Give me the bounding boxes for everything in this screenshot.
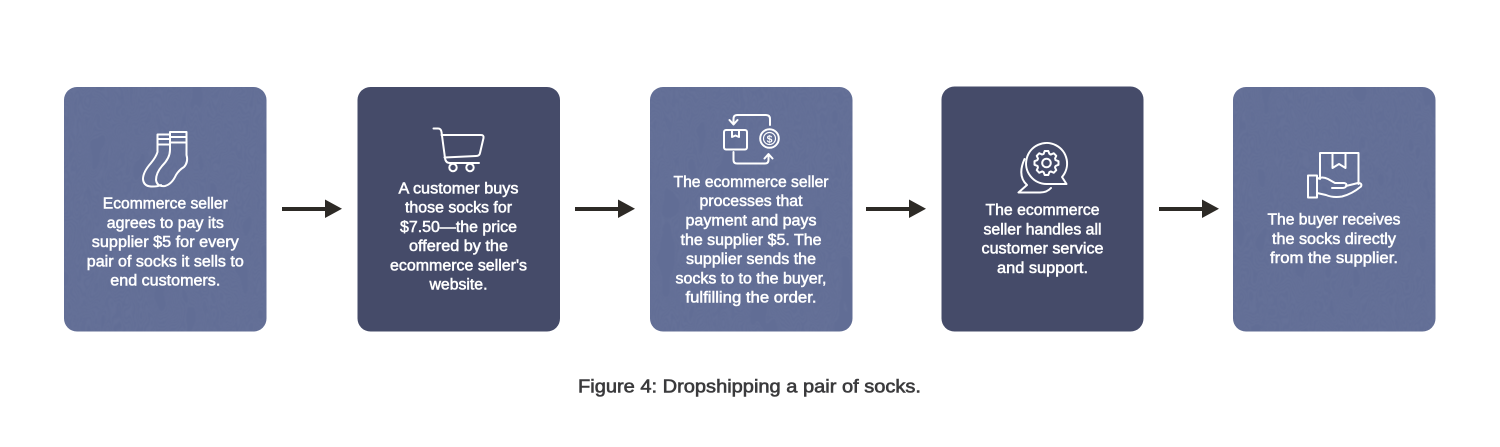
text: step 3 description: payment and pays <box>686 212 817 230</box>
text: step 2 description <box>390 180 527 294</box>
text: step 4 description: customer service <box>982 240 1104 258</box>
text: step 1 description: Ecommerce seller <box>103 196 228 212</box>
text: step 1 description: pair of socks it sells to <box>87 254 244 270</box>
panel: step 4 customer service <box>942 86 1144 332</box>
icon: box and coin exchange <box>724 115 779 164</box>
text: step 2 description: $7.50—the price <box>400 219 517 236</box>
text: step 5 description: The buyer receives <box>1268 212 1401 228</box>
text: step 5 description: from the supplier. <box>1270 250 1398 267</box>
text: step 3 description: fulfilling the order. <box>686 290 816 306</box>
text: step 1 description: agrees to pay its <box>107 215 224 232</box>
panel: step 5 buyer receives socks <box>1233 87 1436 332</box>
text: step 1 description: supplier $5 for every <box>92 234 239 251</box>
text: step 4 description: seller handles all <box>984 222 1102 238</box>
text: step 5 description <box>1268 212 1401 267</box>
text: step 4 description <box>982 202 1104 277</box>
arrow: step 2 to 3 <box>575 200 635 218</box>
panel: step 2 customer buys <box>358 87 560 332</box>
text: step 2 description: ecommerce seller's <box>390 258 527 274</box>
text: step 2 description: offered by the <box>409 238 508 255</box>
text: step 2 description: those socks for <box>405 200 512 216</box>
icon: shopping cart <box>434 128 484 171</box>
panel: step 1 seller agrees with supplier <box>64 87 266 332</box>
icon: box and coin exchange: $ <box>767 134 773 146</box>
arrow: step 4 to 5 <box>1159 200 1219 218</box>
arrow: step 3 to 4 <box>866 200 926 218</box>
panel: step 3 seller processes payment <box>650 87 852 332</box>
text: step 1 description <box>87 196 244 290</box>
icon: speech bubbles with gear <box>1018 143 1067 192</box>
text: step 2 description: website. <box>428 276 488 294</box>
text: step 3 description: supplier sends the <box>686 251 816 268</box>
text: step 3 description: the supplier $5. The <box>680 232 822 249</box>
icon: socks <box>143 132 187 187</box>
arrow: step 1 to 2 <box>282 200 342 218</box>
text: step 1 description: end customers. <box>110 272 220 290</box>
text: step 2 description: A customer buys <box>398 180 519 198</box>
text: step 4 description: and support. <box>997 260 1088 277</box>
text: step 3 description: socks to to the buyer, <box>676 270 826 288</box>
text: step 5 description: the socks directly <box>1272 231 1396 248</box>
icon: hand holding box <box>1308 153 1361 198</box>
text: step 4 description: The ecommerce <box>986 202 1100 219</box>
text: step 3 description: processes that <box>700 193 803 210</box>
caption: figure title: Figure 4: Dropshipping a pair of socks. <box>578 376 921 396</box>
text: step 3 description <box>674 174 828 306</box>
text: step 3 description: The ecommerce seller <box>674 174 828 191</box>
